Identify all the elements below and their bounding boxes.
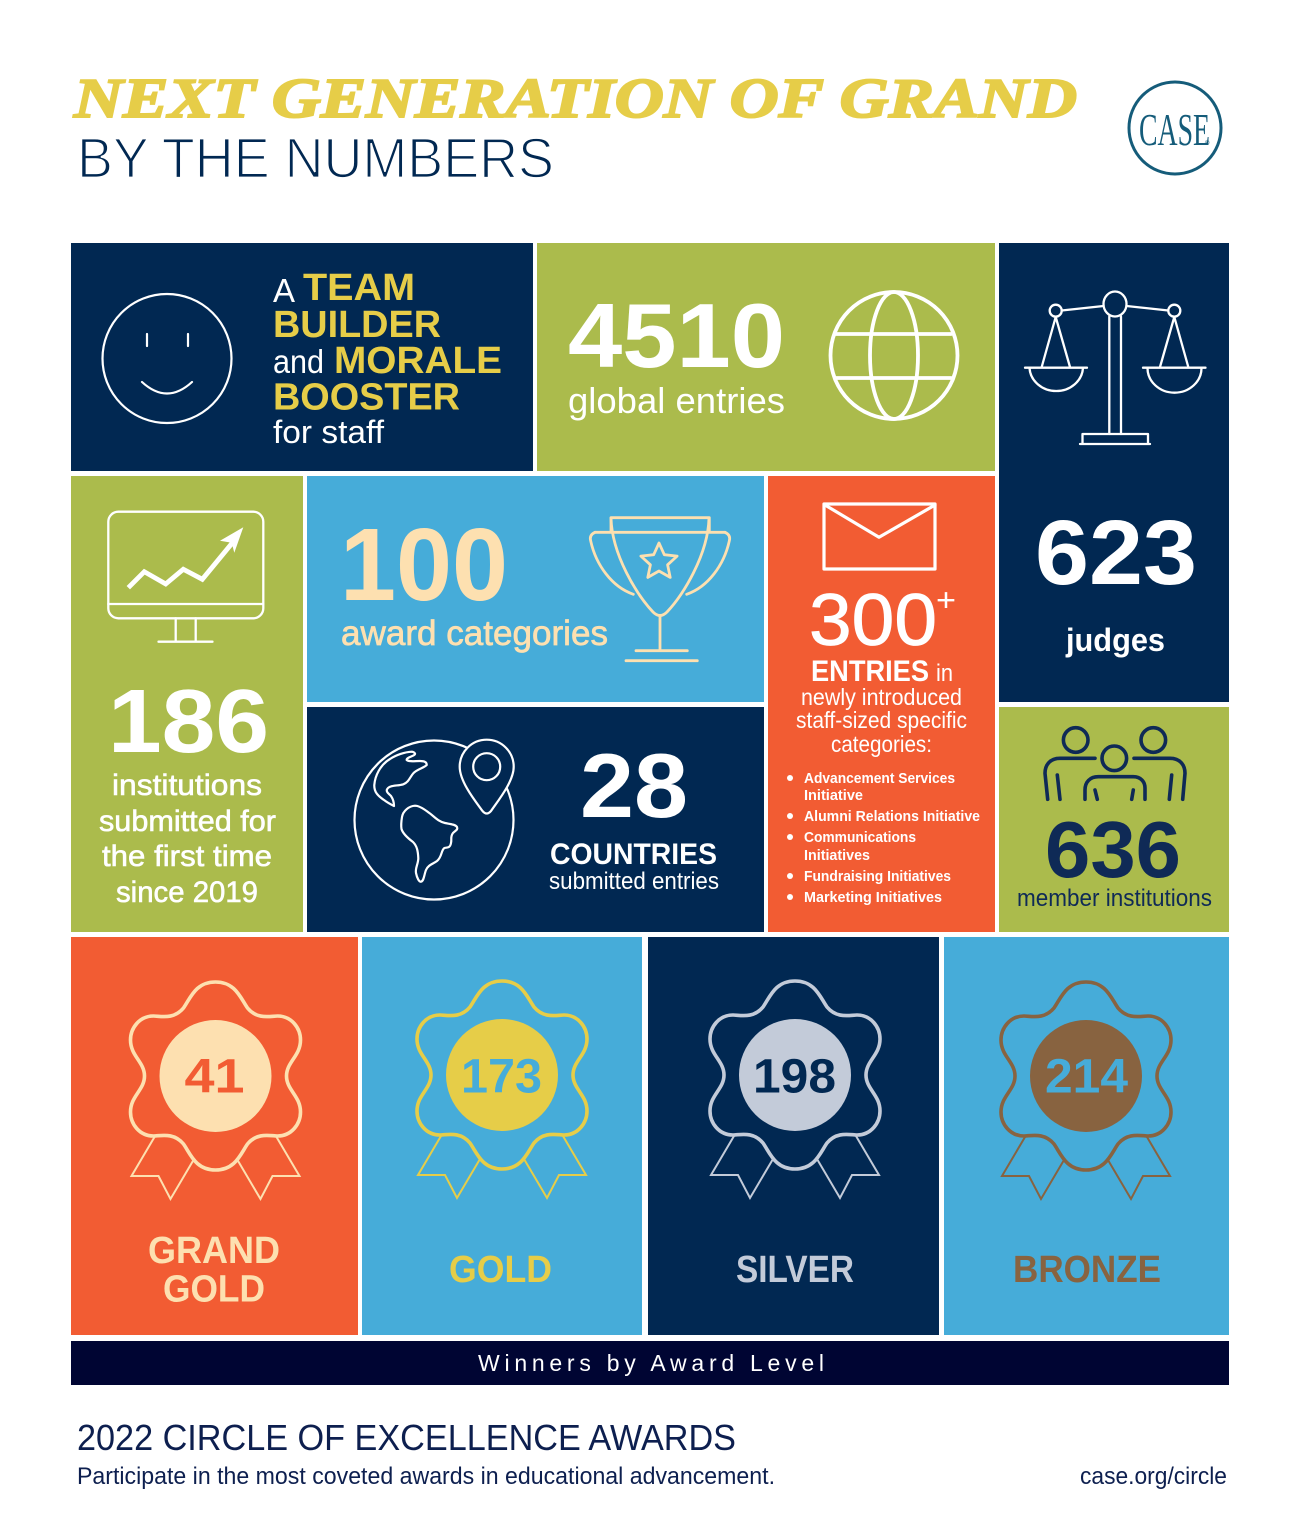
panel background [999, 243, 1229, 702]
panel: member institutions [999, 707, 1229, 932]
text: team builder and morale booster: and [273, 343, 324, 380]
stat: 4510 global entries [568, 286, 785, 421]
stat: 4510 global entries: 4510 [568, 286, 785, 387]
icon: bronze rosette [1001, 982, 1171, 1199]
stat: 300+ entries: staff-sized specific [796, 707, 967, 733]
stat: 623 judges [1035, 502, 1197, 658]
icon: gold rosette [417, 981, 587, 1198]
icon: bronze rosette: 214 [1045, 1050, 1128, 1104]
stat: 28 countries [549, 736, 719, 895]
list: new categories: Communications [804, 830, 916, 846]
panel background [537, 243, 995, 471]
panel: bronze [944, 937, 1229, 1335]
label: grand gold [148, 1230, 280, 1310]
panel: gold [362, 937, 642, 1335]
list: new categories: Initiatives [804, 848, 870, 864]
stat: 300+ entries: 300 [809, 580, 937, 661]
panel: grand gold [71, 937, 358, 1335]
label: grand gold: GRAND [148, 1230, 280, 1272]
footer heading: 2022 CIRCLE OF EXCELLENCE AWARDS [77, 1417, 736, 1458]
stat: 100 award categories [340, 507, 608, 653]
stat: 28 countries: COUNTRIES [550, 838, 717, 871]
panel background [307, 707, 764, 932]
label: gold: GOLD [449, 1249, 552, 1291]
panel background [307, 476, 764, 702]
text: team builder and morale booster: for staff [273, 414, 384, 450]
stat: 186 institutions: submitted for [99, 805, 276, 838]
stat: 623 judges: 623 [1035, 502, 1197, 604]
title: BY THE NUMBERS [77, 126, 554, 190]
icon: grand gold rosette [130, 982, 300, 1199]
banner: winners by award level [71, 1341, 1229, 1385]
icon: CASE logo: ® [1205, 140, 1210, 147]
stat: 636 member institutions: 636 [1045, 805, 1181, 894]
panel background [71, 476, 303, 932]
text: team builder and morale booster: MORALE [334, 340, 502, 382]
panel background [768, 476, 995, 932]
panel: award categories [307, 476, 764, 702]
stat: 186 institutions [99, 672, 276, 909]
stat: 186 institutions: institutions [112, 769, 262, 802]
label: grand gold: GOLD [163, 1268, 265, 1310]
icon: grand gold rosette: 41 [184, 1050, 244, 1104]
list: new categories: Advancement Services [804, 771, 955, 787]
stat: 300+ entries: in [936, 660, 953, 687]
panel background [71, 243, 533, 471]
panel: judges [999, 243, 1229, 702]
icon: silver rosette [710, 981, 880, 1198]
list: new categories: Initiative [804, 788, 863, 804]
stat: 186 institutions: 186 [108, 672, 269, 772]
panel background [362, 937, 642, 1335]
text: team builder and morale booster: A [273, 272, 295, 309]
stat: 186 institutions: since 2019 [116, 876, 258, 909]
footer url: case.org/circle [1080, 1463, 1227, 1490]
icon: scales [1025, 292, 1206, 444]
stat: 28 countries: 28 [580, 736, 688, 837]
panel: silver [648, 937, 939, 1335]
icon: CASE logo: CASE [1139, 104, 1210, 155]
panel: first-time institutions [71, 476, 303, 932]
panel background [999, 707, 1229, 932]
stat: 28 countries: submitted entries [549, 868, 719, 895]
text: team builder and morale booster: BUILDER [273, 304, 441, 346]
label: bronze: BRONZE [1013, 1249, 1161, 1291]
icon: monitor with rising chart [108, 512, 263, 642]
icon: CASE logo [1129, 82, 1221, 174]
stat: 300+ entries: newly introduced [801, 684, 962, 710]
banner: winners by award level: Winners by Award Level [478, 1350, 824, 1376]
list: new categories: Marketing Initiatives [804, 890, 942, 906]
text: team builder and morale booster [273, 267, 502, 450]
list: new categories: Fundraising Initiatives [804, 869, 951, 885]
icon: trophy [590, 518, 730, 661]
stat: 623 judges: judges [1065, 622, 1165, 658]
footer tagline: Participate in the most coveted awards in educational advancement. [77, 1463, 775, 1490]
icon: globe [830, 292, 958, 419]
stat: 300+ entries [796, 580, 967, 757]
panel: 300+ entries [768, 476, 995, 932]
stat: 100 award categories: 100 [340, 507, 508, 622]
icon: three people [1045, 728, 1185, 799]
panel background [648, 937, 939, 1335]
text: team builder and morale booster: BOOSTER [273, 376, 460, 418]
icon: smiley face [102, 294, 232, 423]
stat: 300+ entries: ENTRIES [811, 655, 929, 688]
text: team builder and morale booster: TEAM [303, 267, 415, 309]
panel: global entries [537, 243, 995, 471]
panel background [71, 937, 358, 1335]
stat: 300+ entries: + [936, 582, 956, 618]
stat: 636 member institutions [1017, 805, 1212, 912]
panel: team builder [71, 243, 533, 471]
stat: 100 award categories: award categories [341, 614, 608, 653]
label: silver: SILVER [736, 1249, 854, 1291]
stat: 636 member institutions: member institutions [1017, 885, 1212, 912]
icon: envelope [824, 504, 935, 569]
icon: silver rosette: 198 [753, 1050, 836, 1104]
panel background [944, 937, 1229, 1335]
panel: countries [307, 707, 764, 932]
icon: gold rosette: 173 [461, 1050, 542, 1104]
stat: 300+ entries: categories: [831, 731, 932, 757]
title: NEXT GENERATION OF GRAND [73, 68, 1077, 130]
list: new categories: Alumni Relations Initiative [804, 809, 980, 825]
stat: 186 institutions: the first time [102, 840, 272, 873]
icon: earth with map pin [354, 740, 514, 900]
title [73, 68, 1077, 190]
list: new categories [787, 771, 980, 906]
stat: 4510 global entries: global entries [568, 380, 785, 421]
